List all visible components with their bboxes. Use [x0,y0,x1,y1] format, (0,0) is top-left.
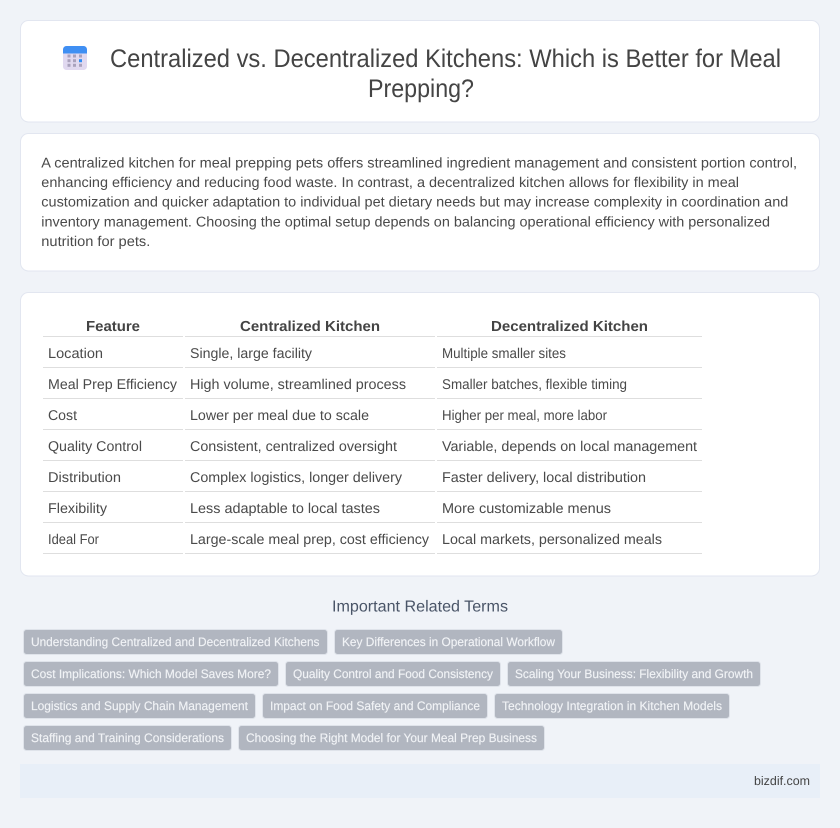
tag [286,662,500,686]
tag [494,694,730,718]
tag: Key Differences in Operational Workflow [342,635,555,649]
table row: location [48,346,566,362]
table row: meal prep efficiency: Smaller batches, flexible timing [442,377,627,393]
table row: quality control: Consistent, centralized oversight [190,439,397,455]
table header row [86,319,648,335]
table row: ideal for: Large-scale meal prep, cost efficiency [190,532,430,548]
footer bar: bizdif.com [754,774,810,788]
tag [334,630,562,654]
text block: summary paragraph: enhancing efficiency and reducing food waste. In contrast, a decentralized kitchen allows for flexibility in meal [41,175,739,191]
panel: related term tags [24,630,760,750]
tag: Logistics and Supply Chain Management [31,699,249,713]
panel: comparison table [20,292,820,576]
table row: cost: Lower per meal due to scale [190,408,369,424]
text block: summary paragraph: A centralized kitchen for meal prepping pets offers streamlined ingredient management and consistent portion control, [41,156,797,172]
heading: important related terms: Important Related Terms [332,598,508,616]
table row: quality control: Variable, depends on local management [442,439,697,455]
text block: summary paragraph: inventory management. Choosing the optimal setup depends on balancing operational efficiency with personalized [41,214,770,230]
table row: flexibility: More customizable menus [442,501,611,517]
tag [24,662,278,686]
table row: quality control: Quality Control [48,439,142,455]
text block: summary paragraph: customization and quicker adaptation to individual pet dietary needs but may increase complexity in coordination and [41,195,788,211]
table row: location: Single, large facility [190,346,313,362]
table row: flexibility: Less adaptable to local tastes [190,501,380,517]
tag: Scaling Your Business: Flexibility and Growth [515,667,753,681]
table row: quality control [48,439,697,455]
panel: title header [20,20,820,122]
panel: introduction text [20,134,820,271]
table row: cost [48,408,607,424]
table row: location: Location [48,346,103,362]
tag: Cost Implications: Which Model Saves More? [31,667,271,681]
tag: Choosing the Right Model for Your Meal Prep Business [246,731,537,745]
tag [24,694,256,718]
tag [24,630,328,654]
title: Prepping? [368,75,474,103]
tag: Understanding Centralized and Decentralized Kitchens [31,635,320,649]
table row: ideal for: Ideal For [48,532,99,548]
text block: summary paragraph [41,156,797,250]
table row: meal prep efficiency: Meal Prep Efficiency [48,377,178,393]
table row: cost: Higher per meal, more labor [442,408,607,424]
table row: ideal for [48,532,662,548]
table row: flexibility: Flexibility [48,501,108,517]
title [110,45,781,103]
table row: ideal for: Local markets, personalized meals [442,532,662,548]
tag: Technology Integration in Kitchen Models [502,699,722,713]
title: Centralized vs. Decentralized Kitchens: Which is Better for Meal [110,45,781,73]
table row: distribution: Distribution [48,470,121,486]
tag [508,662,760,686]
tag: Impact on Food Safety and Compliance [270,699,480,713]
tag: Staffing and Training Considerations [31,731,224,745]
table header row: Feature [86,319,140,335]
table row: distribution: Complex logistics, longer delivery [190,470,403,486]
table row: meal prep efficiency: High volume, streamlined process [190,377,406,393]
tag [238,726,544,750]
text block: summary paragraph: nutrition for pets. [41,234,150,250]
table row: flexibility [48,501,611,517]
tag: Quality Control and Food Consistency [293,667,494,681]
footer bar [20,764,820,798]
icon: calendar grid [63,46,87,70]
tag [24,726,232,750]
table row: cost: Cost [48,408,77,424]
table header row: Centralized Kitchen [240,319,380,335]
table row: distribution: Faster delivery, local distribution [442,470,646,486]
table row: location: Multiple smaller sites [442,346,566,362]
table row: meal prep efficiency [48,377,627,393]
table row: distribution [48,470,646,486]
tag [262,694,488,718]
table header row: Decentralized Kitchen [491,319,648,335]
